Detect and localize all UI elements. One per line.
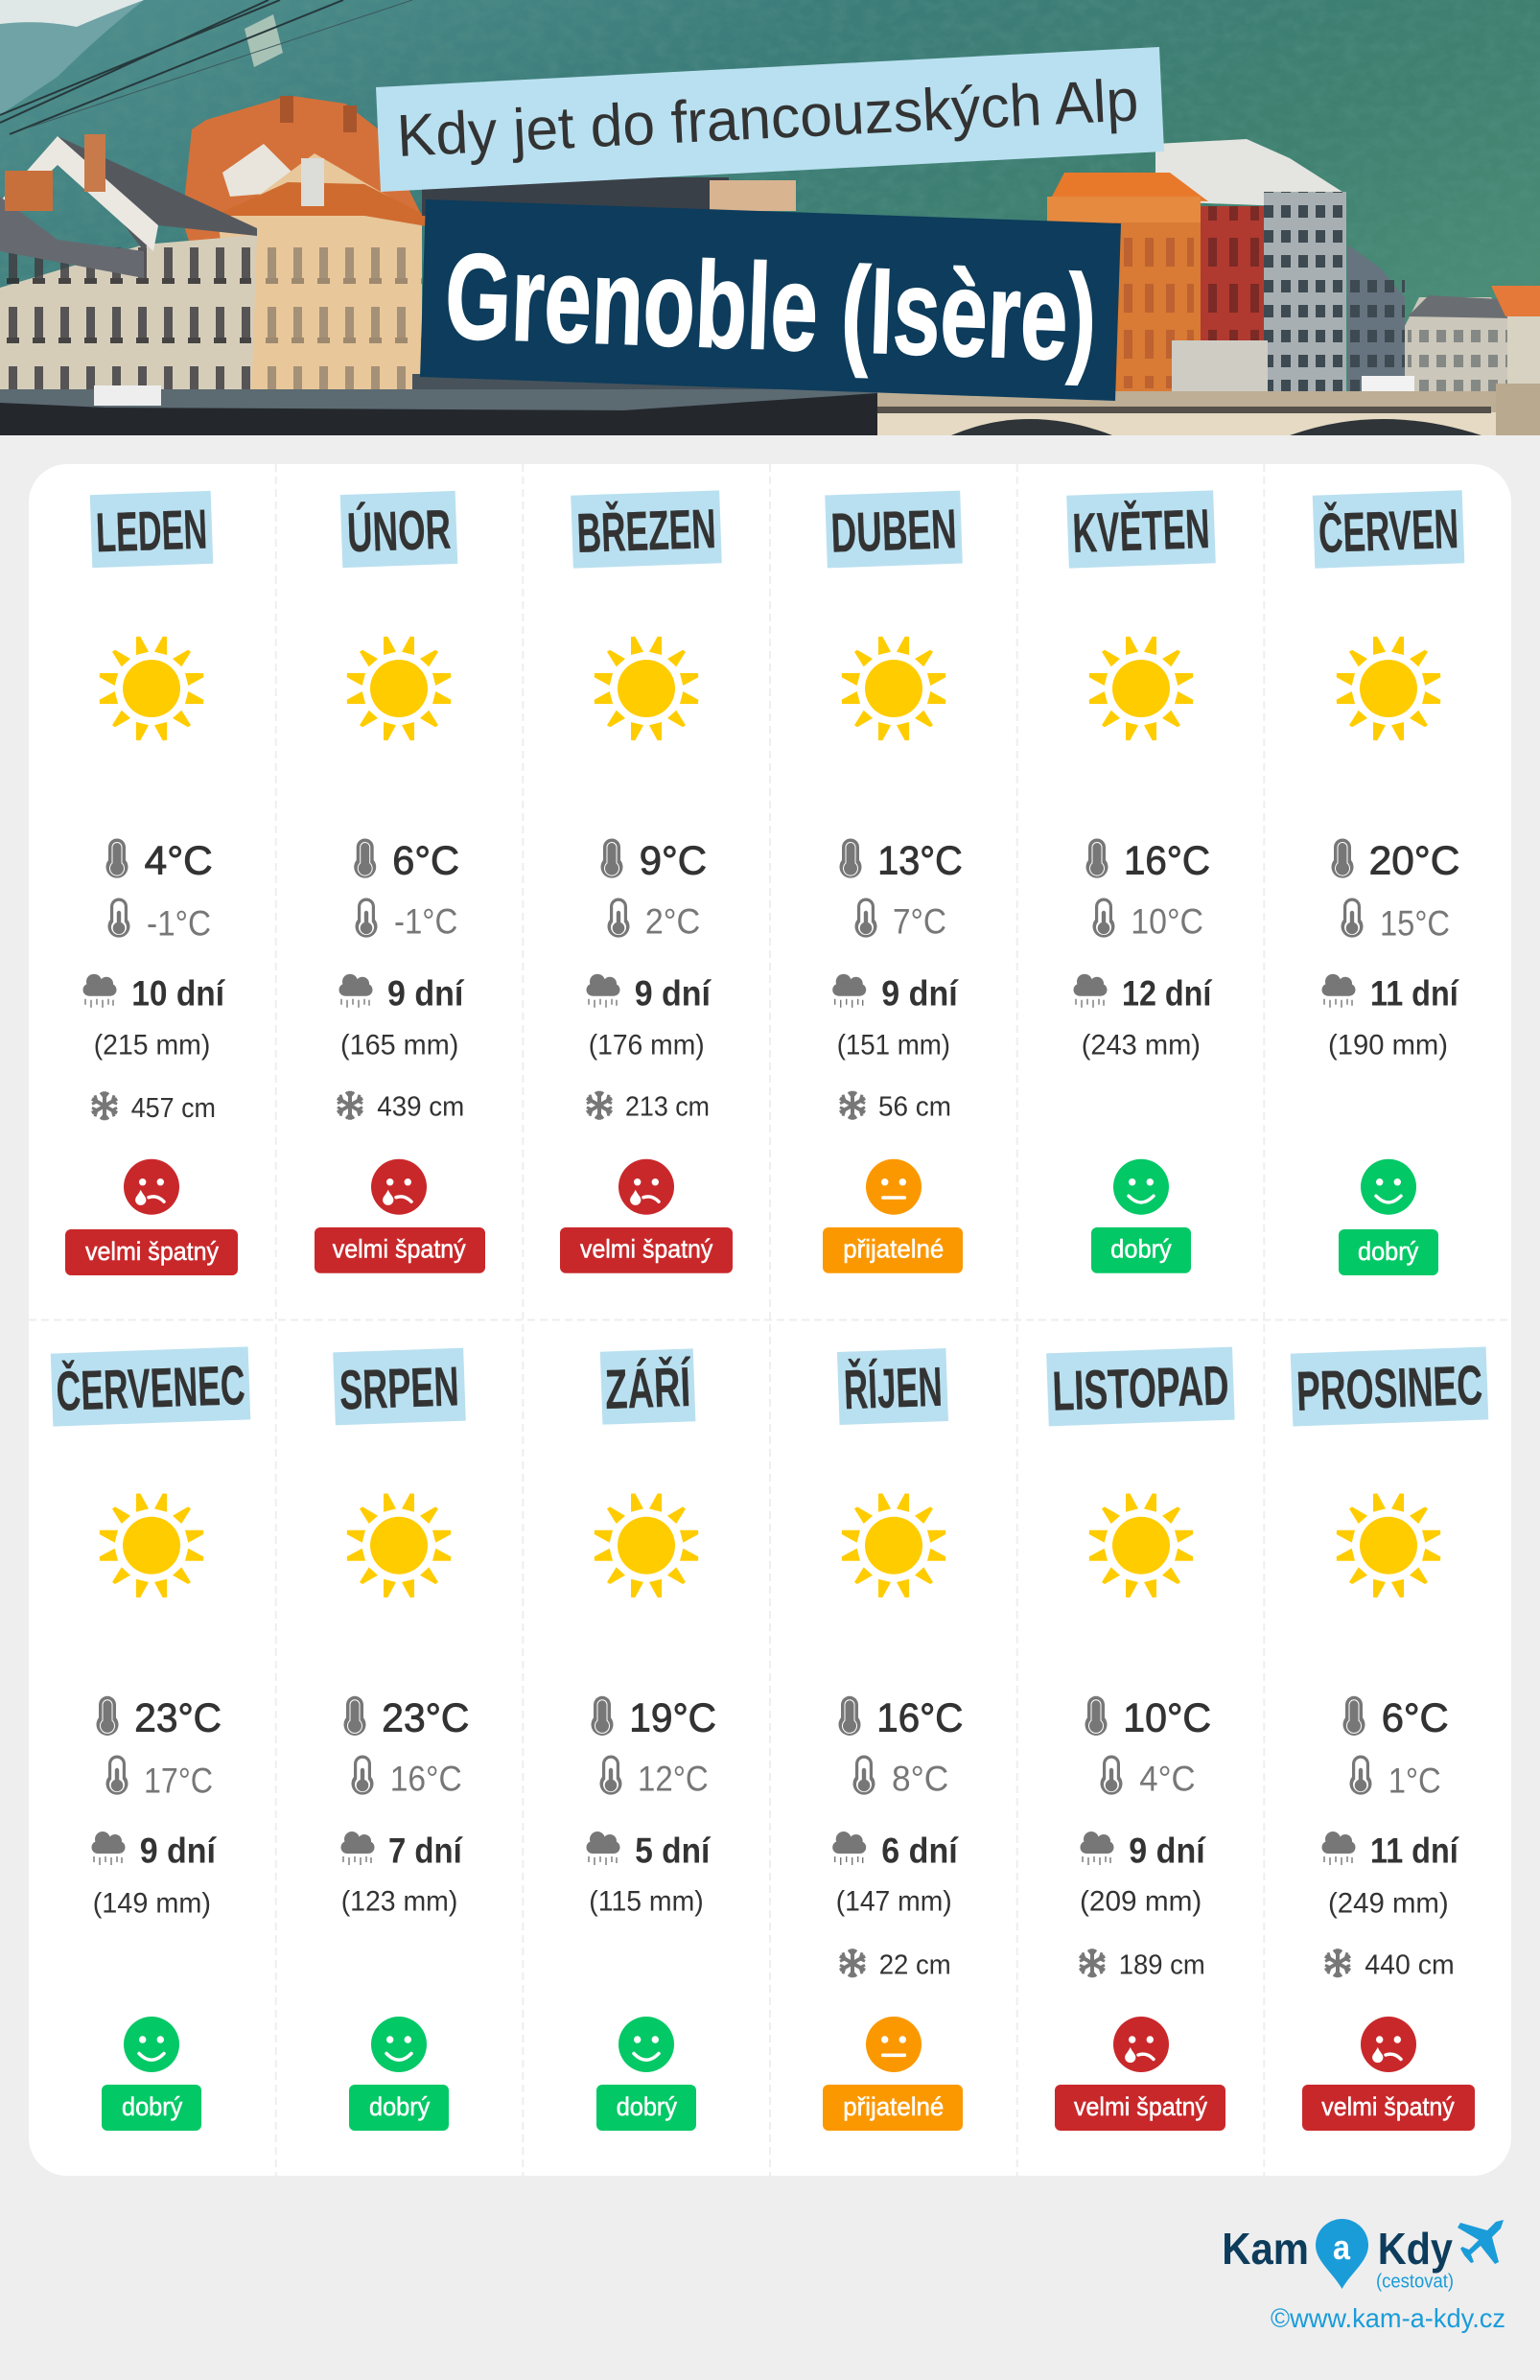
cell: ZÁŘÍ bbox=[587, 1348, 716, 2131]
precipitation: (151 mm) bbox=[837, 1029, 950, 1061]
month label: KVĚTEN bbox=[1066, 490, 1216, 569]
icon: sun bbox=[347, 1493, 451, 1598]
icon: snowflake bbox=[1080, 1948, 1105, 1977]
quay and bridge bbox=[0, 389, 882, 412]
icon: thermometer high bbox=[591, 1696, 614, 1736]
cell: SRPEN bbox=[333, 1348, 469, 2131]
rating badge: dobrý bbox=[1358, 1237, 1419, 1266]
rain days: 7 dní bbox=[388, 1831, 463, 1870]
high temperature: 16°C bbox=[876, 1695, 963, 1740]
icon: thermometer high bbox=[600, 838, 623, 878]
icon: thermometer low bbox=[1341, 898, 1364, 938]
rating badge bbox=[102, 2085, 201, 2131]
icon: airplane bbox=[1458, 2220, 1504, 2264]
rating badge bbox=[315, 1227, 485, 1273]
rating badge: dobrý bbox=[122, 2092, 183, 2121]
subtitle banner bbox=[376, 47, 1164, 192]
month label: ZÁŘÍ: ZÁŘÍ bbox=[604, 1356, 692, 1421]
icon: snowflake bbox=[587, 1091, 612, 1120]
icon: thermometer high bbox=[1085, 838, 1108, 878]
icon: rain cloud bbox=[587, 974, 619, 1008]
icon: thermometer low bbox=[608, 898, 629, 938]
high temperature: 13°C bbox=[877, 838, 963, 883]
cell: KVĚTEN bbox=[1066, 490, 1216, 1273]
precipitation: (176 mm) bbox=[589, 1029, 705, 1061]
icon: sun bbox=[842, 637, 945, 740]
high temperature: 6°C bbox=[392, 838, 459, 883]
icon: sun bbox=[1089, 1493, 1193, 1598]
icon: rain cloud bbox=[587, 1832, 619, 1865]
high temperature: 20°C bbox=[1369, 838, 1459, 883]
high temperature: 23°C bbox=[382, 1695, 469, 1740]
subtitle banner: Kdy jet do francouzských Alp bbox=[395, 67, 1140, 170]
icon: thermometer low bbox=[351, 1755, 374, 1795]
icon: crying face bbox=[371, 1159, 427, 1215]
low temperature: 12°C bbox=[638, 1759, 709, 1798]
cell: ČERVENEC bbox=[51, 1346, 250, 2131]
rating badge bbox=[1339, 1229, 1438, 1275]
month label: ŘÍJEN: ŘÍJEN bbox=[843, 1356, 944, 1421]
icon: snowflake bbox=[840, 1091, 865, 1120]
rating badge bbox=[1055, 2085, 1225, 2131]
rating badge: velmi špatný bbox=[580, 1235, 713, 1264]
icon: sun bbox=[842, 1493, 945, 1598]
icon: sun bbox=[1089, 637, 1193, 740]
icon: happy face bbox=[371, 2017, 427, 2072]
title banner bbox=[420, 199, 1121, 401]
icon: thermometer high bbox=[105, 838, 128, 878]
icon: rain cloud bbox=[82, 974, 117, 1008]
month label: ČERVENEC: ČERVENEC bbox=[55, 1354, 246, 1423]
icon: thermometer high bbox=[343, 1696, 366, 1736]
month label: DUBEN bbox=[825, 491, 963, 568]
month label: SRPEN bbox=[333, 1348, 466, 1425]
month label: KVĚTEN: KVĚTEN bbox=[1071, 498, 1211, 565]
icon: thermometer low bbox=[355, 898, 378, 938]
high temperature: 10°C bbox=[1123, 1695, 1211, 1740]
rating badge: dobrý bbox=[369, 2092, 431, 2121]
icon: rain cloud bbox=[1074, 974, 1107, 1008]
icon: snowflake bbox=[1325, 1948, 1350, 1977]
rating badge bbox=[349, 2085, 449, 2131]
logo tagline: (cestovat) bbox=[1376, 2272, 1454, 2293]
high temperature: 23°C bbox=[134, 1695, 222, 1740]
icon: thermometer high bbox=[838, 1696, 861, 1736]
cell: ŘÍJEN bbox=[823, 1348, 963, 2131]
cell: PROSINEC bbox=[1291, 1346, 1488, 2131]
precipitation: (123 mm) bbox=[341, 1885, 457, 1917]
snowfall: 213 cm bbox=[625, 1091, 710, 1122]
icon: rain cloud bbox=[1321, 1832, 1356, 1865]
icon: snowflake bbox=[92, 1091, 117, 1120]
snowfall: 457 cm bbox=[131, 1093, 216, 1124]
rain days: 9 dní bbox=[881, 973, 959, 1013]
rain days: 12 dní bbox=[1122, 973, 1213, 1013]
logo wordmark: Kam: Kam bbox=[1222, 2224, 1309, 2274]
month label: BŘEZEN bbox=[571, 490, 722, 569]
icon: thermometer high bbox=[96, 1696, 119, 1736]
right buildings bbox=[1155, 139, 1342, 249]
month label: ÚNOR bbox=[340, 491, 457, 568]
month label: BŘEZEN: BŘEZEN bbox=[575, 498, 717, 565]
snowfall: 22 cm bbox=[879, 1949, 951, 1980]
rating badge: velmi špatný bbox=[1074, 2092, 1207, 2121]
icon: thermometer high bbox=[1342, 1696, 1365, 1736]
cell: LISTOPAD bbox=[1046, 1347, 1235, 2131]
rain days: 9 dní bbox=[1129, 1831, 1206, 1870]
cell: ÚNOR bbox=[315, 491, 485, 1273]
rating badge bbox=[823, 1227, 963, 1273]
month label: ČERVEN bbox=[1313, 490, 1464, 569]
icon: rain cloud bbox=[832, 974, 866, 1008]
icon: thermometer low bbox=[107, 898, 130, 938]
high temperature: 6°C bbox=[1382, 1695, 1449, 1740]
rain days: 9 dní bbox=[387, 973, 465, 1013]
rating badge: velmi špatný bbox=[85, 1237, 219, 1266]
rating badge bbox=[1302, 2085, 1475, 2131]
high temperature: 4°C bbox=[145, 838, 213, 883]
low temperature: 8°C bbox=[892, 1759, 948, 1798]
panel: monthly climate grid bbox=[29, 464, 1511, 2176]
icon: sun bbox=[100, 637, 203, 740]
icon: sun bbox=[595, 637, 698, 740]
low temperature: 1°C bbox=[1388, 1761, 1441, 1800]
precipitation: (249 mm) bbox=[1328, 1887, 1449, 1919]
title banner: Grenoble (Isère) bbox=[443, 227, 1099, 386]
rain days: 11 dní bbox=[1370, 1831, 1459, 1870]
snowfall: 439 cm bbox=[377, 1091, 464, 1122]
rain days: 11 dní bbox=[1370, 973, 1459, 1013]
icon: sun bbox=[1337, 1493, 1440, 1598]
icon: sun bbox=[347, 637, 451, 740]
icon: thermometer low bbox=[1093, 898, 1114, 938]
icon: crying face bbox=[618, 1159, 674, 1215]
month label: ÚNOR: ÚNOR bbox=[346, 499, 452, 564]
month label: LISTOPAD bbox=[1046, 1347, 1235, 1426]
low temperature: 10°C bbox=[1131, 901, 1203, 941]
icon: neutral face bbox=[866, 1159, 922, 1215]
icon: sun bbox=[595, 1493, 698, 1598]
logo letter a: a bbox=[1333, 2228, 1351, 2267]
precipitation: (209 mm) bbox=[1080, 1885, 1202, 1917]
icon: sun bbox=[1337, 637, 1440, 740]
rain days: 10 dní bbox=[131, 973, 226, 1013]
icon: rain cloud bbox=[92, 1832, 125, 1865]
icon: rain cloud bbox=[1321, 974, 1356, 1008]
cell: LEDEN bbox=[65, 491, 238, 1275]
icon: thermometer low bbox=[855, 898, 876, 938]
left buildings bbox=[182, 96, 422, 249]
rating badge: velmi špatný bbox=[333, 1235, 466, 1264]
icon: thermometer low bbox=[1101, 1755, 1122, 1795]
icon: snowflake bbox=[338, 1091, 362, 1120]
icon: snowflake bbox=[840, 1948, 865, 1977]
precipitation: (149 mm) bbox=[93, 1887, 211, 1919]
low temperature: 7°C bbox=[893, 901, 946, 941]
icon: thermometer low bbox=[600, 1755, 621, 1795]
low temperature: 15°C bbox=[1380, 904, 1450, 944]
icon: thermometer low bbox=[105, 1755, 128, 1795]
icon: thermometer high bbox=[1331, 838, 1354, 878]
icon: thermometer low bbox=[853, 1755, 875, 1795]
precipitation: (115 mm) bbox=[589, 1885, 704, 1917]
snowfall: 440 cm bbox=[1365, 1949, 1455, 1980]
month label: ŘÍJEN bbox=[837, 1348, 948, 1425]
month label: ZÁŘÍ bbox=[600, 1348, 695, 1425]
rating badge bbox=[596, 2085, 696, 2131]
icon: rain cloud bbox=[832, 1832, 866, 1865]
rating badge bbox=[1091, 1227, 1191, 1273]
header photo: Grenoble riverside with mountains bbox=[0, 0, 1540, 435]
snowfall: 56 cm bbox=[878, 1091, 951, 1122]
copyright website link: ©www.kam-a-kdy.cz bbox=[1271, 2303, 1505, 2333]
icon: neutral face bbox=[866, 2017, 922, 2072]
month label: DUBEN: DUBEN bbox=[829, 498, 958, 565]
icon: thermometer high bbox=[1085, 1696, 1107, 1736]
icon: rain cloud bbox=[339, 974, 372, 1008]
icon: rain cloud bbox=[341, 1832, 374, 1865]
logo: Kam a Kdy bbox=[1222, 2219, 1504, 2293]
icon: crying face bbox=[124, 1159, 179, 1215]
rating badge: dobrý bbox=[617, 2092, 677, 2121]
centre dark buildings behind banners bbox=[422, 177, 729, 216]
rating badge bbox=[560, 1227, 733, 1273]
icon: thermometer high bbox=[840, 838, 861, 878]
icon: thermometer low bbox=[1350, 1755, 1371, 1795]
icon: crying face bbox=[1361, 2017, 1416, 2072]
precipitation: (243 mm) bbox=[1082, 1029, 1201, 1061]
month label: LEDEN: LEDEN bbox=[95, 498, 208, 565]
low temperature: -1°C bbox=[394, 901, 457, 941]
snowfall: 189 cm bbox=[1119, 1949, 1205, 1980]
precipitation: (147 mm) bbox=[836, 1885, 952, 1917]
cell: ČERVEN bbox=[1313, 490, 1464, 1275]
high temperature: 9°C bbox=[640, 838, 707, 883]
low temperature: -1°C bbox=[147, 904, 211, 944]
cell: BŘEZEN bbox=[560, 490, 733, 1273]
icon: rain cloud bbox=[1080, 1832, 1114, 1865]
rain days: 9 dní bbox=[140, 1831, 218, 1870]
rating badge: velmi špatný bbox=[1321, 2092, 1455, 2121]
cell: DUBEN bbox=[823, 491, 963, 1273]
rating badge bbox=[65, 1229, 238, 1275]
rating badge bbox=[823, 2085, 963, 2131]
rating badge: přijatelné bbox=[843, 2092, 944, 2121]
rain days: 6 dní bbox=[881, 1831, 959, 1870]
low temperature: 2°C bbox=[645, 901, 700, 941]
low temperature: 16°C bbox=[390, 1759, 462, 1798]
low temperature: 17°C bbox=[144, 1761, 213, 1800]
logo wordmark: Kdy: Kdy bbox=[1378, 2224, 1453, 2274]
icon: map pin bbox=[1316, 2219, 1368, 2289]
rain days: 9 dní bbox=[635, 973, 712, 1013]
month label: LISTOPAD: LISTOPAD bbox=[1051, 1354, 1230, 1423]
icon: happy face bbox=[618, 2017, 674, 2072]
high temperature: 16°C bbox=[1124, 838, 1210, 883]
precipitation: (215 mm) bbox=[94, 1029, 210, 1061]
month label: ČERVENEC bbox=[51, 1346, 250, 1427]
precipitation: (165 mm) bbox=[340, 1029, 458, 1061]
rating badge: dobrý bbox=[1110, 1235, 1172, 1264]
icon: thermometer high bbox=[354, 838, 376, 878]
month label: LEDEN bbox=[90, 491, 213, 568]
icon: happy face bbox=[124, 2017, 179, 2072]
rain days: 5 dní bbox=[635, 1831, 712, 1870]
month label: SRPEN: SRPEN bbox=[338, 1355, 460, 1422]
icon: happy face bbox=[1361, 1159, 1416, 1215]
high temperature: 19°C bbox=[629, 1695, 716, 1740]
low temperature: 4°C bbox=[1139, 1759, 1196, 1798]
precipitation: (190 mm) bbox=[1328, 1029, 1448, 1061]
icon: sun bbox=[100, 1493, 203, 1598]
rating badge: přijatelné bbox=[843, 1235, 944, 1264]
icon: crying face bbox=[1113, 2017, 1169, 2072]
icon: happy face bbox=[1113, 1159, 1169, 1215]
